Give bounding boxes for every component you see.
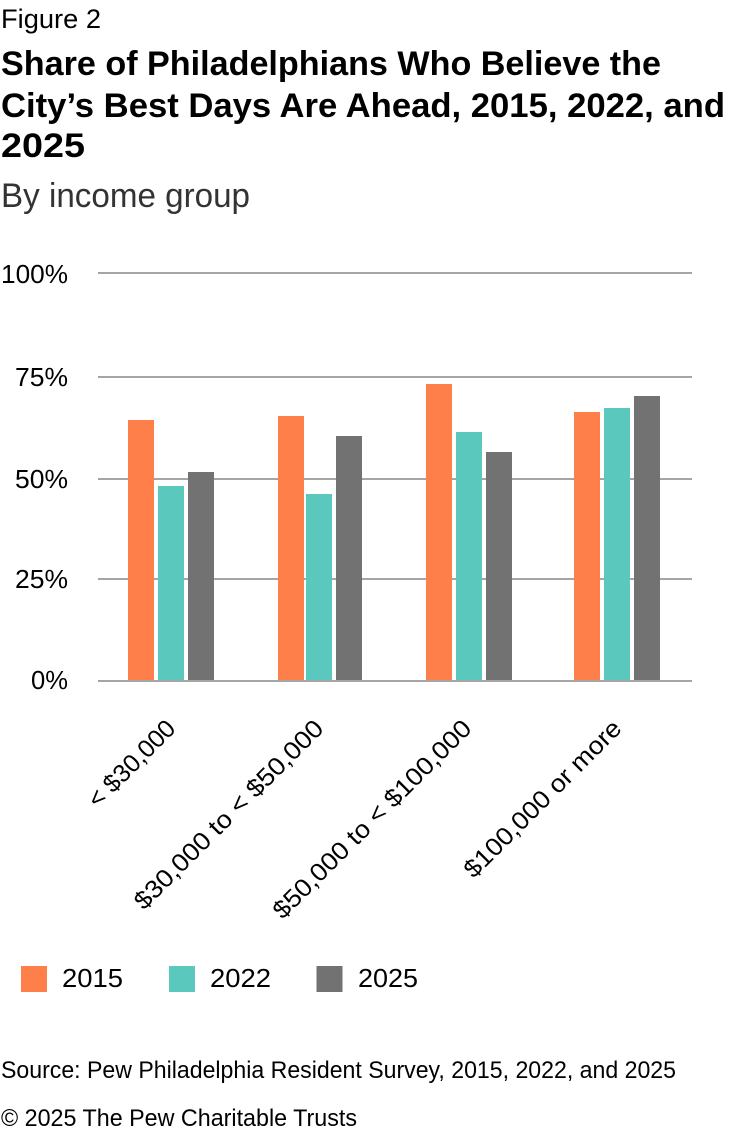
bars: $30,000 to under $50,000 xyxy=(278,416,362,680)
bars: $50,000 to under $100,000 xyxy=(426,384,512,680)
title: Share of Philadelphians Who Believe the xyxy=(1,45,661,83)
title: 2025 xyxy=(1,127,85,165)
figure label: Figure 2 xyxy=(1,4,101,34)
y axis labels: 100% xyxy=(1,259,68,289)
legend xyxy=(21,963,418,993)
legend: 2022 xyxy=(210,963,271,993)
subtitle: By income group xyxy=(1,177,250,215)
y axis labels: 0% xyxy=(31,665,68,695)
x axis labels xyxy=(82,714,627,924)
y axis labels: 75% xyxy=(15,362,68,392)
y axis labels xyxy=(1,259,68,695)
x axis labels: $50,000 to < $100,000 xyxy=(267,714,477,924)
y axis labels: 50% xyxy=(15,464,68,494)
source note: Source: Pew Philadelphia Resident Survey, 2015, 2022, and 2025 xyxy=(1,1057,676,1084)
x axis labels: $30,000 to < $50,000 xyxy=(128,714,329,915)
y axis labels: 25% xyxy=(15,564,68,594)
title xyxy=(1,45,725,165)
bars: under $30,000 xyxy=(128,420,214,680)
x axis labels: < $30,000 xyxy=(82,714,181,813)
legend: 2025 xyxy=(358,963,418,993)
bar chart xyxy=(1,259,692,924)
bars: $100,000 or more xyxy=(574,396,660,680)
title: City’s Best Days Are Ahead, 2015, 2022, and xyxy=(1,87,725,125)
copyright: © 2025 The Pew Charitable Trusts xyxy=(1,1105,357,1132)
x axis labels: $100,000 or more xyxy=(458,714,627,883)
legend: 2015 xyxy=(62,963,123,993)
